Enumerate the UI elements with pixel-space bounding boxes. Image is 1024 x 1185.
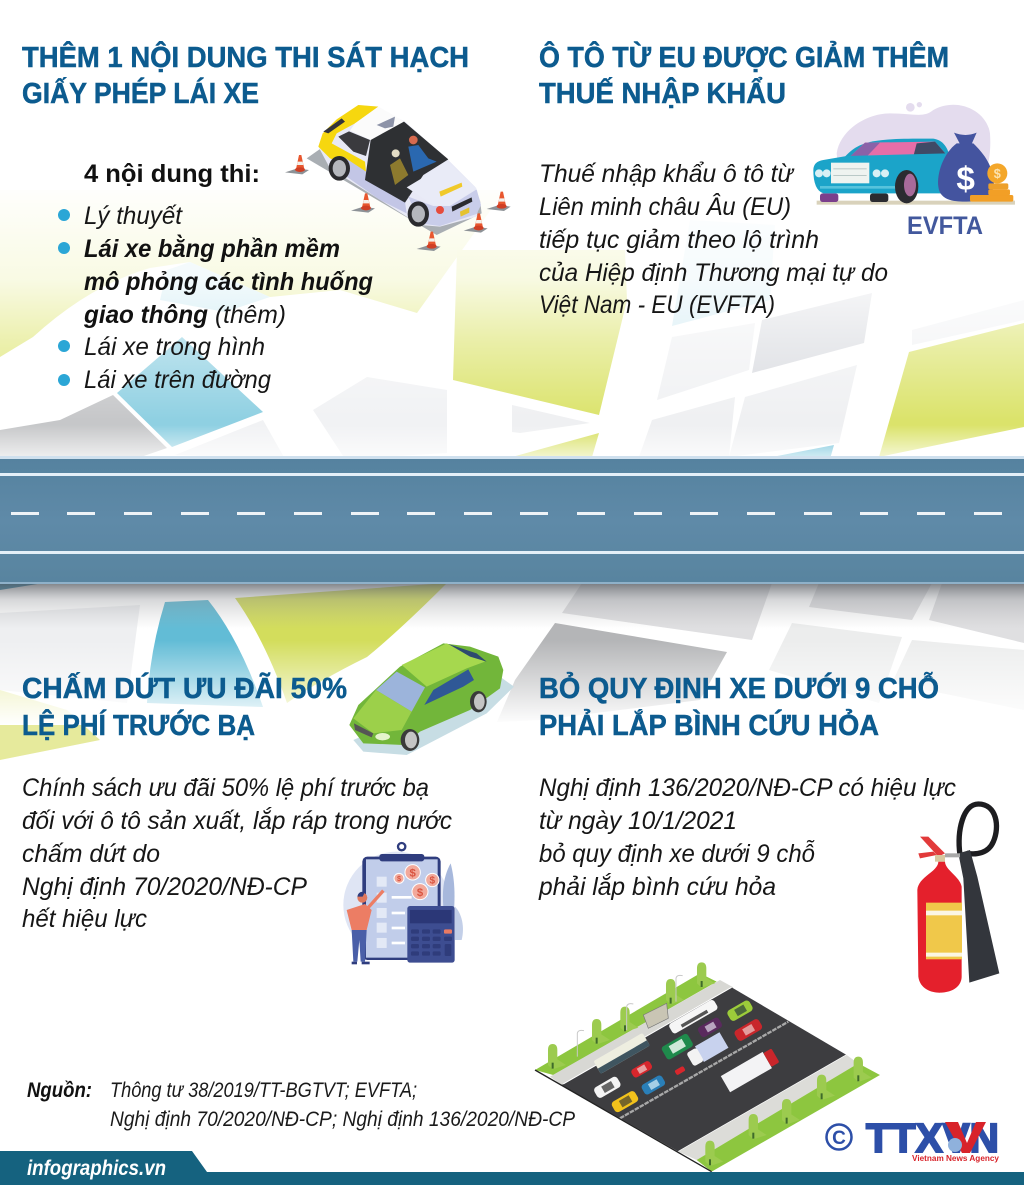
text block: EU import tax: Thuế nhập khẩu ô tô từ xyxy=(539,160,795,188)
bullet list of test contents: Lái xe bằng phần mềm xyxy=(84,234,340,263)
icon: clipboard and calculator xyxy=(343,843,463,964)
source note: Thông tư 38/2019/TT-BGTVT; EVFTA; xyxy=(110,1079,417,1102)
heading: driving test: THÊM 1 NỘI DUNG THI SÁT HẠCH xyxy=(22,40,469,74)
source note xyxy=(27,1079,575,1131)
panel: registration fee xyxy=(22,643,514,964)
bullet list of test contents xyxy=(58,202,373,394)
text block: EU import tax: Liên minh châu Âu (EU) xyxy=(539,192,791,221)
map background: upper xyxy=(0,180,1024,459)
bullet list of test contents: Lái xe trên đường xyxy=(84,366,271,394)
footer band xyxy=(0,1151,1024,1185)
heading: driving test: GIẤY PHÉP LÁI XE xyxy=(22,76,259,110)
source note: Nghị định 70/2020/NĐ-CP; Nghị định 136/2020/NĐ-CP xyxy=(110,1108,575,1131)
text block: EU import tax: Việt Nam - EU (EVFTA) xyxy=(539,291,775,319)
text block: registration fee: Chính sách ưu đãi 50% lệ phí trước bạ xyxy=(22,774,429,802)
source note: Nguồn: xyxy=(27,1079,92,1102)
text block: registration fee: hết hiệu lực xyxy=(22,905,147,933)
icon: clipboard and calculator: $ xyxy=(397,874,401,883)
icon: clipboard and calculator: $ xyxy=(417,887,424,899)
bullet list of test contents: mô phỏng các tình huống xyxy=(84,268,373,296)
heading: EU import tax: THUẾ NHẬP KHẨU xyxy=(539,76,786,110)
illustration: isometric road with traffic xyxy=(535,962,880,1172)
bullet list of test contents: (thêm) xyxy=(215,301,286,329)
icon: clipboard and calculator: $ xyxy=(410,868,417,880)
logo: TTXVN: C xyxy=(832,1128,846,1149)
heading: fire extinguisher: PHẢI LẮP BÌNH CỨU HỎA xyxy=(539,708,879,742)
icon: green car xyxy=(349,643,514,755)
text block: EU import tax: của Hiệp định Thương mại tự do xyxy=(539,259,888,287)
panel: EU car import tax xyxy=(539,40,1015,319)
list heading: 4 nội dung thi: xyxy=(84,160,260,188)
heading: EU import tax: Ô TÔ TỪ EU ĐƯỢC GIẢM THÊM xyxy=(539,40,949,74)
map background: lower xyxy=(0,582,1024,760)
heading: driving test xyxy=(22,40,469,110)
heading: fire extinguisher xyxy=(539,671,939,742)
text block: EU import tax: tiếp tục giảm theo lộ trình xyxy=(539,226,819,254)
panel: fire extinguisher rule xyxy=(538,671,999,993)
heading: fire extinguisher: BỎ QUY ĐỊNH XE DƯỚI 9 CHỖ xyxy=(539,671,939,705)
logo: TTXVN: TTXVN xyxy=(866,1115,999,1161)
text block: fire extinguisher: phải lắp bình cứu hỏa xyxy=(538,872,776,901)
text block: registration fee: đối với ô tô sản xuất, lắp ráp trong nước xyxy=(22,806,452,835)
icon: driving school car with cones xyxy=(285,105,511,251)
heading: registration fee: LỆ PHÍ TRƯỚC BẠ xyxy=(22,708,255,742)
bullet list of test contents: giao thông xyxy=(83,301,208,329)
text block: fire extinguisher: bỏ quy định xe dưới 9 chỗ xyxy=(539,839,815,868)
text block: fire extinguisher xyxy=(538,774,956,901)
icon: car and money bag: $ xyxy=(994,167,1001,181)
bullet list of test contents: Lái xe trong hình xyxy=(84,333,265,361)
EVFTA label: EVFTA xyxy=(907,212,983,240)
heading: registration fee xyxy=(22,671,347,742)
heading: EU import tax xyxy=(539,40,949,110)
text block: registration fee: Nghị định 70/2020/NĐ-CP xyxy=(22,873,307,901)
heading: registration fee: CHẤM DỨT ƯU ĐÃI 50% xyxy=(22,671,347,705)
text block: fire extinguisher: từ ngày 10/1/2021 xyxy=(539,807,737,835)
icon: car and money bag: $ xyxy=(956,161,975,198)
logo: TTXVN: Vietnam News Agency xyxy=(912,1153,999,1163)
text block: fire extinguisher: Nghị định 136/2020/NĐ-CP có hiệu lực xyxy=(539,774,956,802)
text block: EU import tax xyxy=(539,160,888,319)
bullet list of test contents: Lý thuyết xyxy=(84,202,183,230)
text block: registration fee: chấm dứt do xyxy=(22,840,160,868)
icon: car and money bag xyxy=(813,102,1015,205)
footer band: infographics.vn xyxy=(27,1157,166,1180)
icon: clipboard and calculator: $ xyxy=(430,876,436,887)
road band xyxy=(0,456,1024,584)
panel: driving test xyxy=(22,40,511,394)
icon: fire extinguisher xyxy=(917,804,999,993)
text block: registration fee xyxy=(22,774,452,933)
